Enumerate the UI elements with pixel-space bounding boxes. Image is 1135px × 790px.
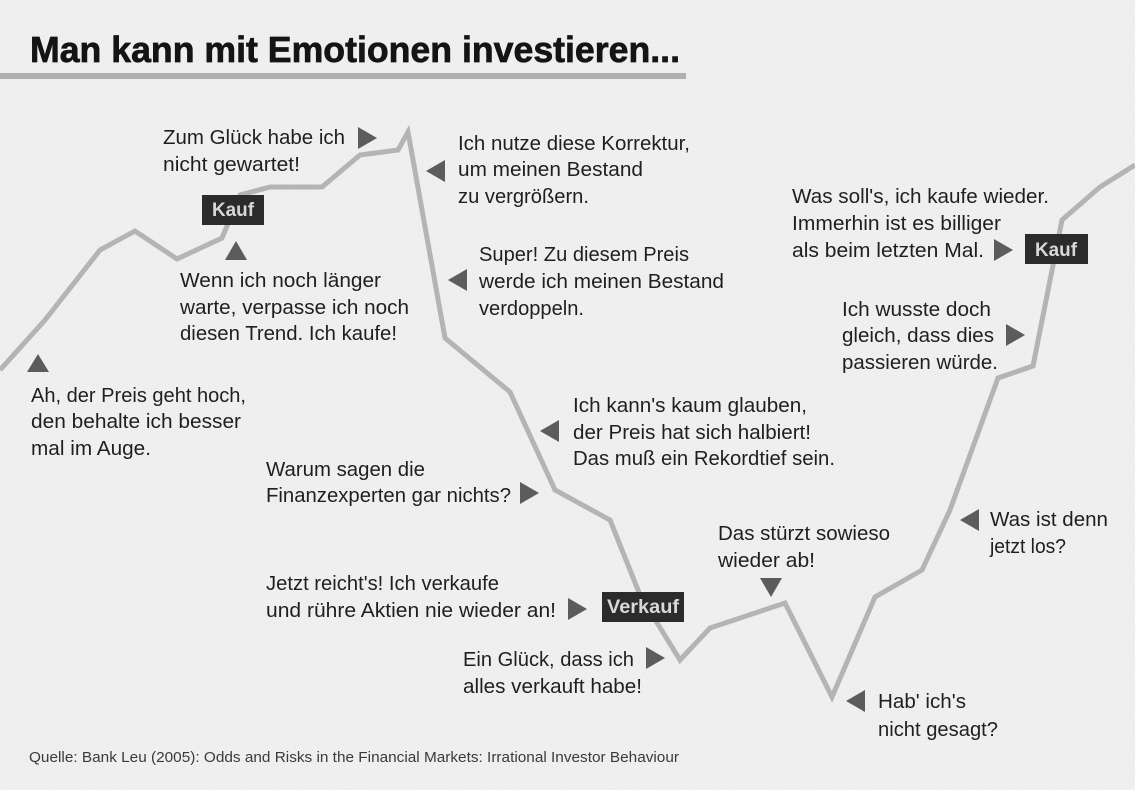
callout: Zum Glück habe ich nicht gewartet	[163, 127, 377, 176]
callout: Jetzt reicht's	[266, 573, 587, 622]
label: Kauf 1	[202, 195, 264, 225]
source note: Quelle: Bank Leu (2005): Odds and Risks in the Financial Markets: Irrational Investor Behaviour	[29, 749, 679, 766]
label: Kauf 2: Kauf	[1035, 240, 1078, 261]
callout: Ah, der Preis geht hoch: den behalte ich besser	[31, 411, 241, 433]
callout: Das stürzt sowieso	[717, 523, 890, 597]
callout: Ich nutze diese Korrektur	[426, 133, 690, 208]
callout: Ich wusste doch: Ich wusste doch	[842, 299, 991, 321]
callout: Super! Zu diesem Preis: Super! Zu diesem Preis	[479, 244, 689, 266]
callout: Jetzt reicht's: und rühre Aktien nie wieder an!	[266, 600, 556, 622]
callout: Hab' ich's nicht gesagt: Hab' ich's	[878, 691, 966, 713]
callout: Ah, der Preis geht hoch: mal im Auge.	[31, 438, 151, 460]
callout: Hab' ich's nicht gesagt: nicht gesagt?	[878, 719, 998, 741]
callout: Ich nutze diese Korrektur: um meinen Bestand	[458, 159, 643, 181]
title: Man kann mit Emotionen investieren...	[30, 29, 680, 70]
callout: Hab' ich's nicht gesagt	[846, 690, 998, 741]
callout: Ah, der Preis geht hoch	[27, 354, 246, 460]
callout: Was ist denn jetzt los: jetzt los?	[989, 536, 1066, 558]
callout: Ein Glück	[463, 647, 665, 698]
callout: Ich nutze diese Korrektur: zu vergrößern.	[458, 186, 589, 208]
callout: Warum sagen die Finanzexperten: Warum sagen die	[266, 459, 425, 481]
callout: Wenn ich noch länger warte: warte, verpasse ich noch	[179, 297, 409, 319]
callout: Ich kann's kaum glauben: Das muß ein Rekordtief sein.	[573, 448, 835, 470]
callout: Zum Glück habe ich nicht gewartet: Zum Glück habe ich	[163, 127, 345, 149]
callout: Ein Glück: Ein Glück, dass ich	[463, 649, 634, 671]
callout: Super! Zu diesem Preis	[448, 244, 724, 320]
callout: Super! Zu diesem Preis: verdoppeln.	[479, 298, 584, 320]
label: Kauf 1: Kauf	[212, 200, 255, 221]
callout: Ich wusste doch: passieren würde.	[842, 352, 998, 374]
callout: Zum Glück habe ich nicht gewartet: nicht gewartet!	[163, 154, 300, 176]
callout: Was soll's, ich kaufe wieder: Was soll's, ich kaufe wieder.	[792, 186, 1049, 208]
callout: Wenn ich noch länger warte: diesen Trend. Ich kaufe!	[180, 323, 397, 345]
callout: Wenn ich noch länger warte: Wenn ich noch länger	[180, 270, 381, 292]
callout: Was ist denn jetzt los	[960, 509, 1108, 558]
label: Kauf 2	[1025, 234, 1088, 264]
title underline	[0, 73, 686, 79]
callout: Ah, der Preis geht hoch: Ah, der Preis geht hoch,	[31, 385, 246, 407]
callout: Ich nutze diese Korrektur: Ich nutze diese Korrektur,	[458, 133, 690, 155]
callout: Das stürzt sowieso: Das stürzt sowieso	[718, 523, 890, 545]
callout: Was soll's, ich kaufe wieder: Immerhin ist es billiger	[792, 213, 1001, 235]
callout: Das stürzt sowieso: wieder ab!	[717, 550, 815, 572]
callout: Ich kann's kaum glauben	[540, 395, 835, 470]
callout: Ein Glück: alles verkauft habe!	[463, 676, 642, 698]
callout: Super! Zu diesem Preis: werde ich meinen Bestand	[478, 271, 724, 293]
label: Verkauf: Verkauf	[607, 597, 680, 618]
price line chart	[0, 132, 1135, 697]
callout: Was ist denn jetzt los: Was ist denn	[990, 509, 1108, 531]
callout: Warum sagen die Finanzexperten: Finanzexperten gar nichts?	[266, 485, 511, 507]
callout: Jetzt reicht's: Jetzt reicht's! Ich verkaufe	[266, 573, 499, 595]
callout: Ich wusste doch: gleich, dass dies	[842, 325, 994, 347]
callout: Warum sagen die Finanzexperten	[266, 459, 539, 507]
callout: Wenn ich noch länger warte	[179, 241, 409, 345]
label: Verkauf	[602, 592, 684, 622]
callout: Was soll's, ich kaufe wieder	[792, 186, 1049, 262]
callout: Ich kann's kaum glauben: der Preis hat sich halbiert!	[573, 422, 811, 444]
callout: Was soll's, ich kaufe wieder: als beim letzten Mal.	[792, 240, 984, 262]
callout: Ich kann's kaum glauben: Ich kann's kaum glauben,	[573, 395, 807, 417]
callout: Ich wusste doch	[842, 299, 1025, 374]
